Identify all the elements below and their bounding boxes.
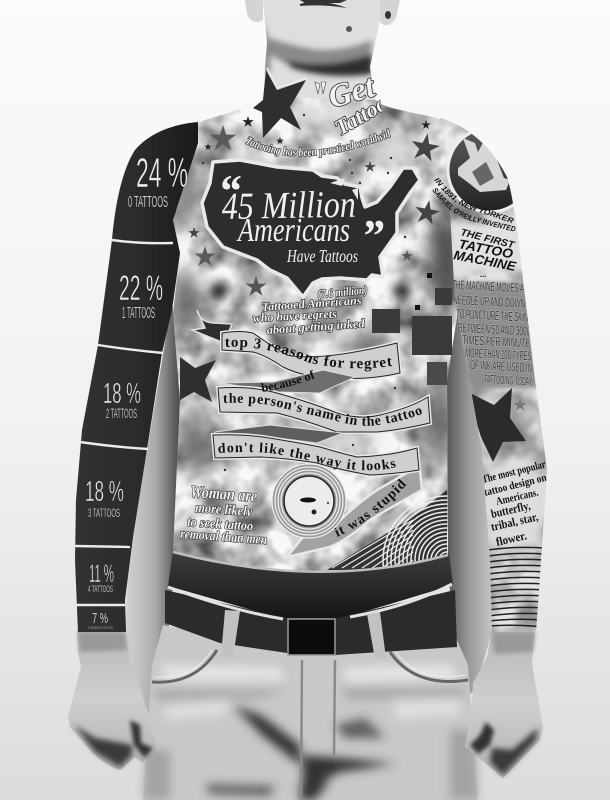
icon: tattoo machine [458, 135, 510, 192]
pocket seams [152, 650, 468, 682]
torso mottling [170, 90, 465, 580]
right hand [465, 630, 543, 778]
stat: 11%: 4 TATTOOS [88, 584, 113, 594]
neck text: Get a Tattoo: Tattoo [330, 90, 392, 140]
stat: 18% [85, 476, 124, 520]
bar chart: tattoo counts on sleeve [75, 149, 188, 630]
banner fold behind because of [220, 370, 355, 393]
neck text: Get a Tattoo [329, 78, 382, 136]
neck fang marks [315, 82, 326, 94]
arm dark shade behind machine text [450, 282, 538, 388]
banner: the person's name in the tattoo: the person's name in the tattoo [223, 393, 422, 426]
forearm stripes [488, 547, 545, 627]
opening quote: “ [218, 165, 241, 216]
arm caption: first tattoo machine heading [452, 227, 517, 279]
jeans folds [205, 705, 395, 800]
arm text block: how machine works [452, 277, 533, 389]
banner: don't like the way it looks: don't like the way it looks [218, 442, 396, 470]
stat: 7% [88, 610, 113, 630]
stat: 24%: 24 % [136, 149, 188, 196]
neck text: Get a Tattoo: Get a [324, 61, 401, 115]
arm text: most popular designs: Americans. [495, 487, 540, 508]
USA map [202, 160, 420, 297]
stat: 18%: 18 % [85, 476, 124, 508]
arm caption: first tattoo machine heading: MACHINE [452, 247, 517, 274]
subheading: Have Tattoos: Have Tattoos [286, 246, 358, 266]
right arm skin: TATTOOING TODAY [484, 372, 533, 389]
right arm skin: TO PUNCTURE THE SKIN [456, 306, 529, 325]
belt loop right [367, 612, 386, 659]
dividers [75, 240, 173, 605]
jeans [143, 625, 478, 800]
arm text: most popular designs: flower. [495, 528, 528, 549]
arm text: most popular designs: butterfly, [490, 498, 532, 521]
closing quote: ” [361, 210, 384, 261]
belt buckle [288, 619, 335, 655]
banner: it was stupid: it was stupid [334, 478, 406, 537]
torso skin [170, 90, 467, 580]
large star lower chest [180, 357, 216, 402]
regret stat text: about getting inked [266, 316, 366, 337]
text: women more likely: removal than men [180, 527, 268, 548]
chest dots [202, 114, 406, 471]
fly seams [301, 660, 335, 800]
head and neck [245, 0, 400, 110]
arm text: most popular designs: tribal, star, [490, 509, 539, 534]
heading: 45 Million: 45 Million [221, 184, 356, 228]
stat: 7%: 7 % [92, 610, 108, 627]
arm caption: first tattoo machine heading: ... [480, 270, 487, 279]
banner: it was stupid [284, 470, 423, 559]
arm text block: how machine works: TIMES PER MINUTE [462, 332, 531, 351]
stars on chest [188, 116, 442, 296]
wall shadow: left gap [125, 300, 181, 720]
line art lower right [327, 490, 448, 570]
regret stat text: Tattooed Americans [261, 293, 362, 314]
shoulder circle emblem [446, 132, 514, 214]
arm mottling [442, 118, 547, 632]
curved caption around emblem: SAMUEL O'REILLY INVENTED [432, 188, 516, 232]
banner: don't like the way it looks [210, 432, 421, 477]
arm highlight behind caption [450, 222, 525, 275]
banner: top 3 reasons [220, 330, 402, 380]
hand shadow [74, 725, 132, 767]
hand shadow [490, 728, 538, 775]
stat: 22%: 22 % [119, 269, 163, 308]
arm text: most popular designs: tattoo design on [483, 472, 548, 499]
big arm star [468, 388, 526, 462]
ears [245, 0, 400, 25]
left hand [68, 630, 157, 770]
right arm skin: OF INK ARE USED IN [470, 357, 533, 375]
stat: 18%: 3 TATTOOS [88, 506, 120, 520]
left arm sleeve [75, 122, 198, 632]
navel circle [272, 464, 346, 538]
arm text: most popular designs: The most popular [481, 459, 547, 486]
waist rim [173, 552, 448, 572]
regret stat text: (7.6 million) [317, 283, 368, 301]
arm text: most popular designs [484, 462, 546, 546]
text: women more likely: to seek tattoo [187, 515, 254, 535]
stat: 24%: 0 TATTOOS [128, 194, 168, 211]
great lakes [330, 178, 358, 200]
curved caption around emblem: IN 1891, NEW YORKER [434, 178, 514, 224]
text: women more likely [180, 482, 268, 548]
nipples [210, 282, 411, 300]
text: women more likely: Woman are [190, 482, 258, 506]
torso shading [170, 101, 467, 480]
arm caption: first tattoo machine heading: THE FIRST [459, 227, 516, 251]
regret stat text: who have regrets [252, 307, 337, 325]
forearm text patch [481, 461, 549, 549]
arm text block: how machine works: BETWEEN 50 AND 3000 [458, 320, 531, 339]
stat: 24% [128, 149, 188, 211]
banner fold dark [214, 425, 343, 443]
neck star [253, 68, 307, 138]
lips [300, 0, 347, 8]
small arm star [513, 398, 527, 411]
bar chart: tattoo counts on sleeve: 11 % [89, 560, 114, 588]
arm text block: how machine works: THE MACHINE MOVES A [452, 277, 525, 296]
stat: 22% [119, 269, 163, 322]
bar chart: tattoo counts on sleeve: 1 TATTOOS [122, 305, 155, 322]
banner: top 3 reasons: top 3 reasons for regret [225, 338, 392, 372]
text: women more likely: more likely [195, 501, 253, 520]
stat: 18%: 18 % [103, 378, 141, 410]
stat: 18% [103, 378, 141, 421]
text: because of: because of [260, 370, 315, 392]
arm caption: first tattoo machine heading: TATTOO [457, 236, 514, 261]
wall shadow: right gap [446, 310, 492, 700]
arc caption: Tattooing has been practiced worldwide [245, 128, 391, 158]
right arm skin [440, 110, 555, 640]
banner tail [192, 310, 232, 343]
heading: Americans: Americans [236, 212, 350, 249]
underwear band [168, 550, 453, 620]
belt loop left [221, 610, 240, 658]
right chest squares [372, 273, 452, 385]
arm text block: how machine works: NEEDLE UP AND DOWN [453, 292, 526, 311]
stat: 11% [88, 560, 114, 594]
bar chart: tattoo counts on sleeve: 2 TATTOOS [106, 405, 137, 421]
belt [165, 584, 457, 659]
stat: 7%: 5 OR MORE TATTOOS [88, 625, 113, 630]
regret stat text [252, 283, 368, 337]
